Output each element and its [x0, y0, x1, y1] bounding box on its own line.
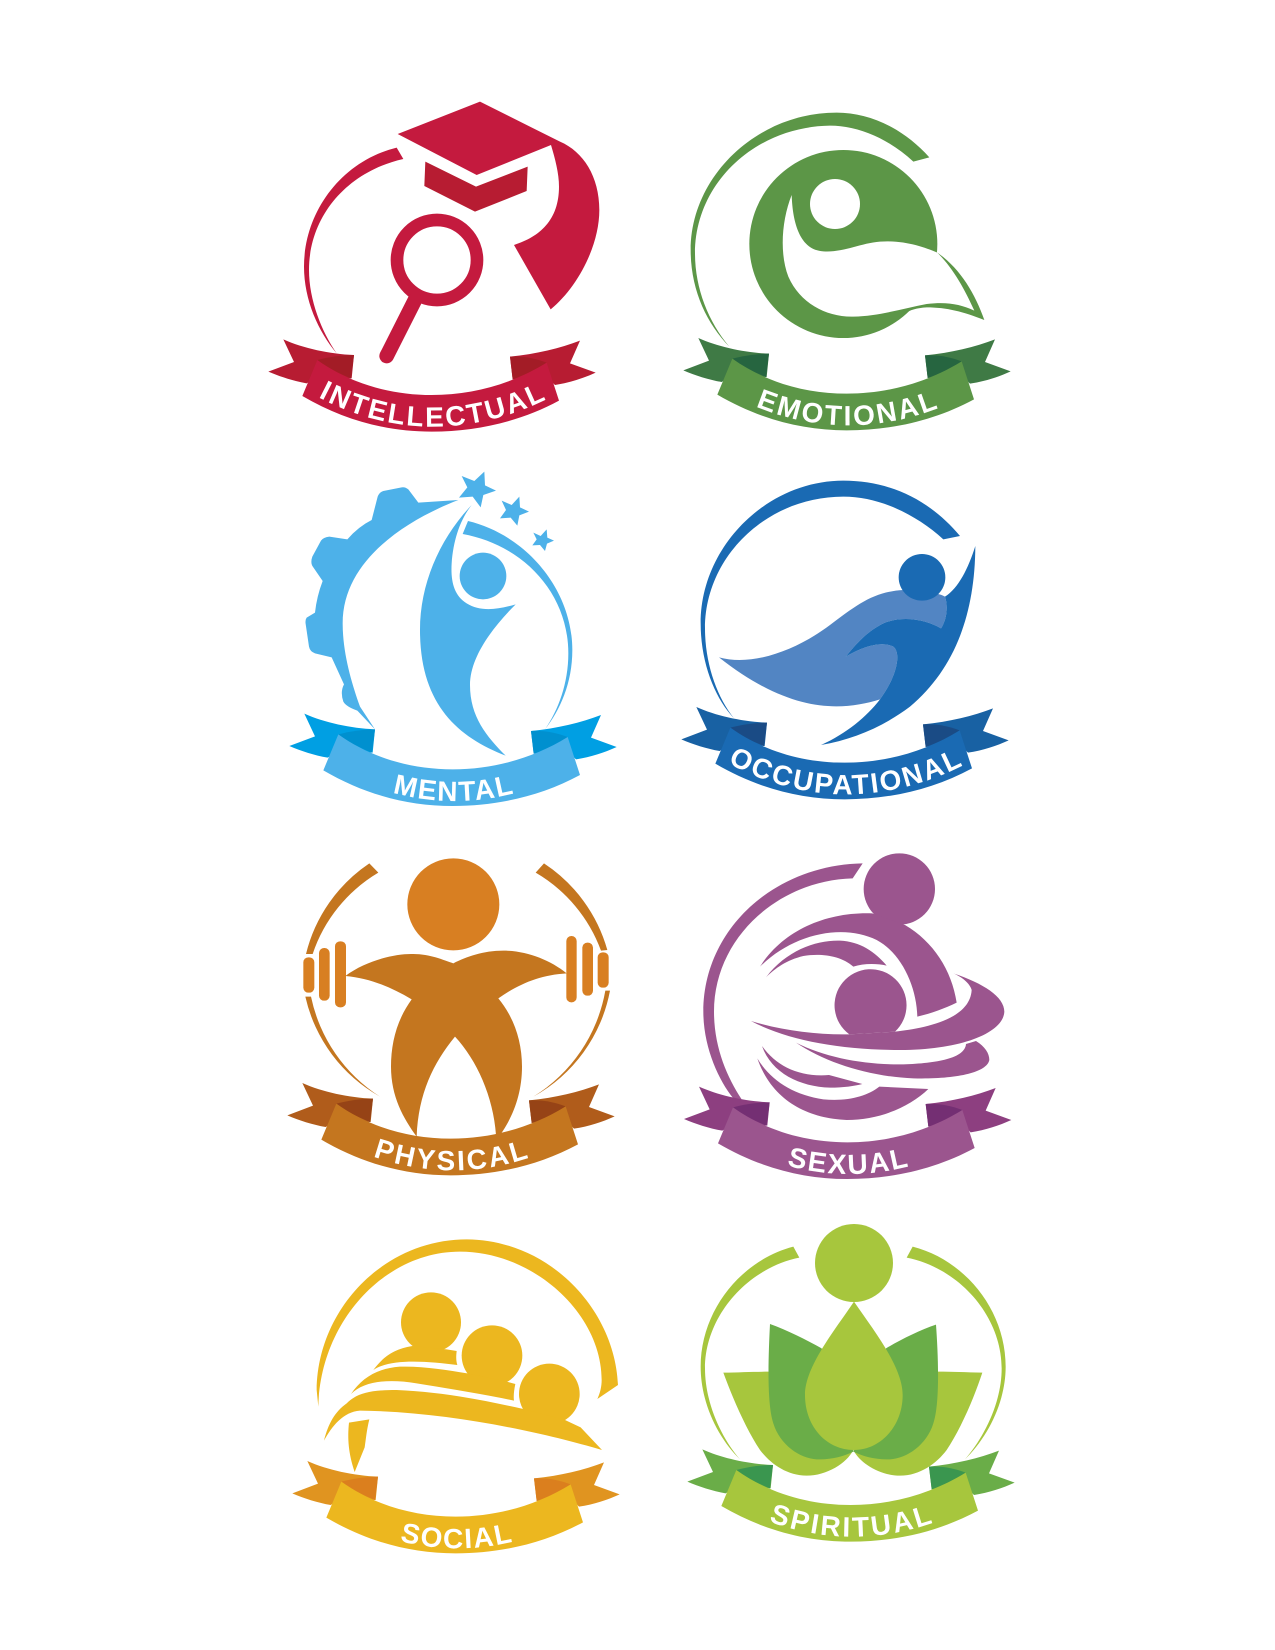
ribbon: physical: [287, 1083, 614, 1176]
ring arc: [703, 863, 863, 1099]
icon: two embracing figures: [751, 853, 1004, 1120]
ribbon: mental: [290, 714, 616, 806]
ribbon: occupational: OCCUPATIONAL: [732, 749, 962, 794]
icon: cap base: [424, 162, 528, 212]
ribbon: intellectual: INTELLECTUAL: [320, 380, 546, 427]
ribbon: occupational: [681, 707, 1009, 800]
icon: head: [815, 1224, 893, 1302]
ribbon: mental: MENTAL: [394, 774, 514, 802]
icon: raised figure: [420, 505, 516, 756]
ring arc: [701, 481, 960, 718]
icon: three people: [324, 1292, 602, 1472]
badge: mental: [290, 472, 616, 806]
ring arc: [463, 521, 572, 729]
ring arc: [317, 1239, 618, 1407]
ribbon: intellectual: [268, 339, 596, 432]
ribbon: sexual: SEXUAL: [788, 1148, 908, 1174]
ribbon: sexual: [684, 1086, 1012, 1179]
ring arcs: [701, 1247, 1006, 1459]
ribbon: social: [292, 1461, 620, 1554]
ribbon: physical: PHYSICAL: [374, 1138, 528, 1170]
badge: sexual: [684, 853, 1012, 1179]
ribbon: emotional: [684, 338, 1010, 430]
icon: stars: [459, 472, 554, 551]
ribbon: emotional: EMOTIONAL: [757, 389, 938, 426]
ring arc: [691, 113, 929, 347]
icon: graduation cap with swoosh: [398, 102, 599, 309]
icon: dumbbells: [303, 936, 609, 1007]
icon: cape: [719, 590, 947, 706]
badge: intellectual: [268, 102, 600, 432]
badge: physical: [287, 858, 614, 1176]
badge: emotional: [684, 112, 1010, 430]
icon: circle with leaf figure: [749, 150, 984, 338]
icon: magnifying glass: [387, 220, 477, 356]
icon: flying figure: [821, 546, 975, 745]
ribbon: spiritual: [688, 1449, 1014, 1542]
badge: spiritual: [688, 1224, 1014, 1542]
icon: centre drop: [805, 1302, 903, 1450]
badge: social: [292, 1239, 620, 1554]
badge: occupational: [681, 480, 1009, 800]
icon: middle lotus petals: [769, 1324, 938, 1459]
ring arcs: [305, 863, 610, 1097]
icon: gear ring: [305, 487, 458, 729]
icon: outer lotus petals: [723, 1372, 982, 1476]
icon: head: [407, 858, 499, 950]
ribbon: spiritual: SPIRITUAL: [770, 1505, 932, 1537]
icon: body: [345, 951, 567, 1137]
ribbon: social: SOCIAL: [401, 1524, 512, 1549]
ring arc: [304, 148, 403, 353]
